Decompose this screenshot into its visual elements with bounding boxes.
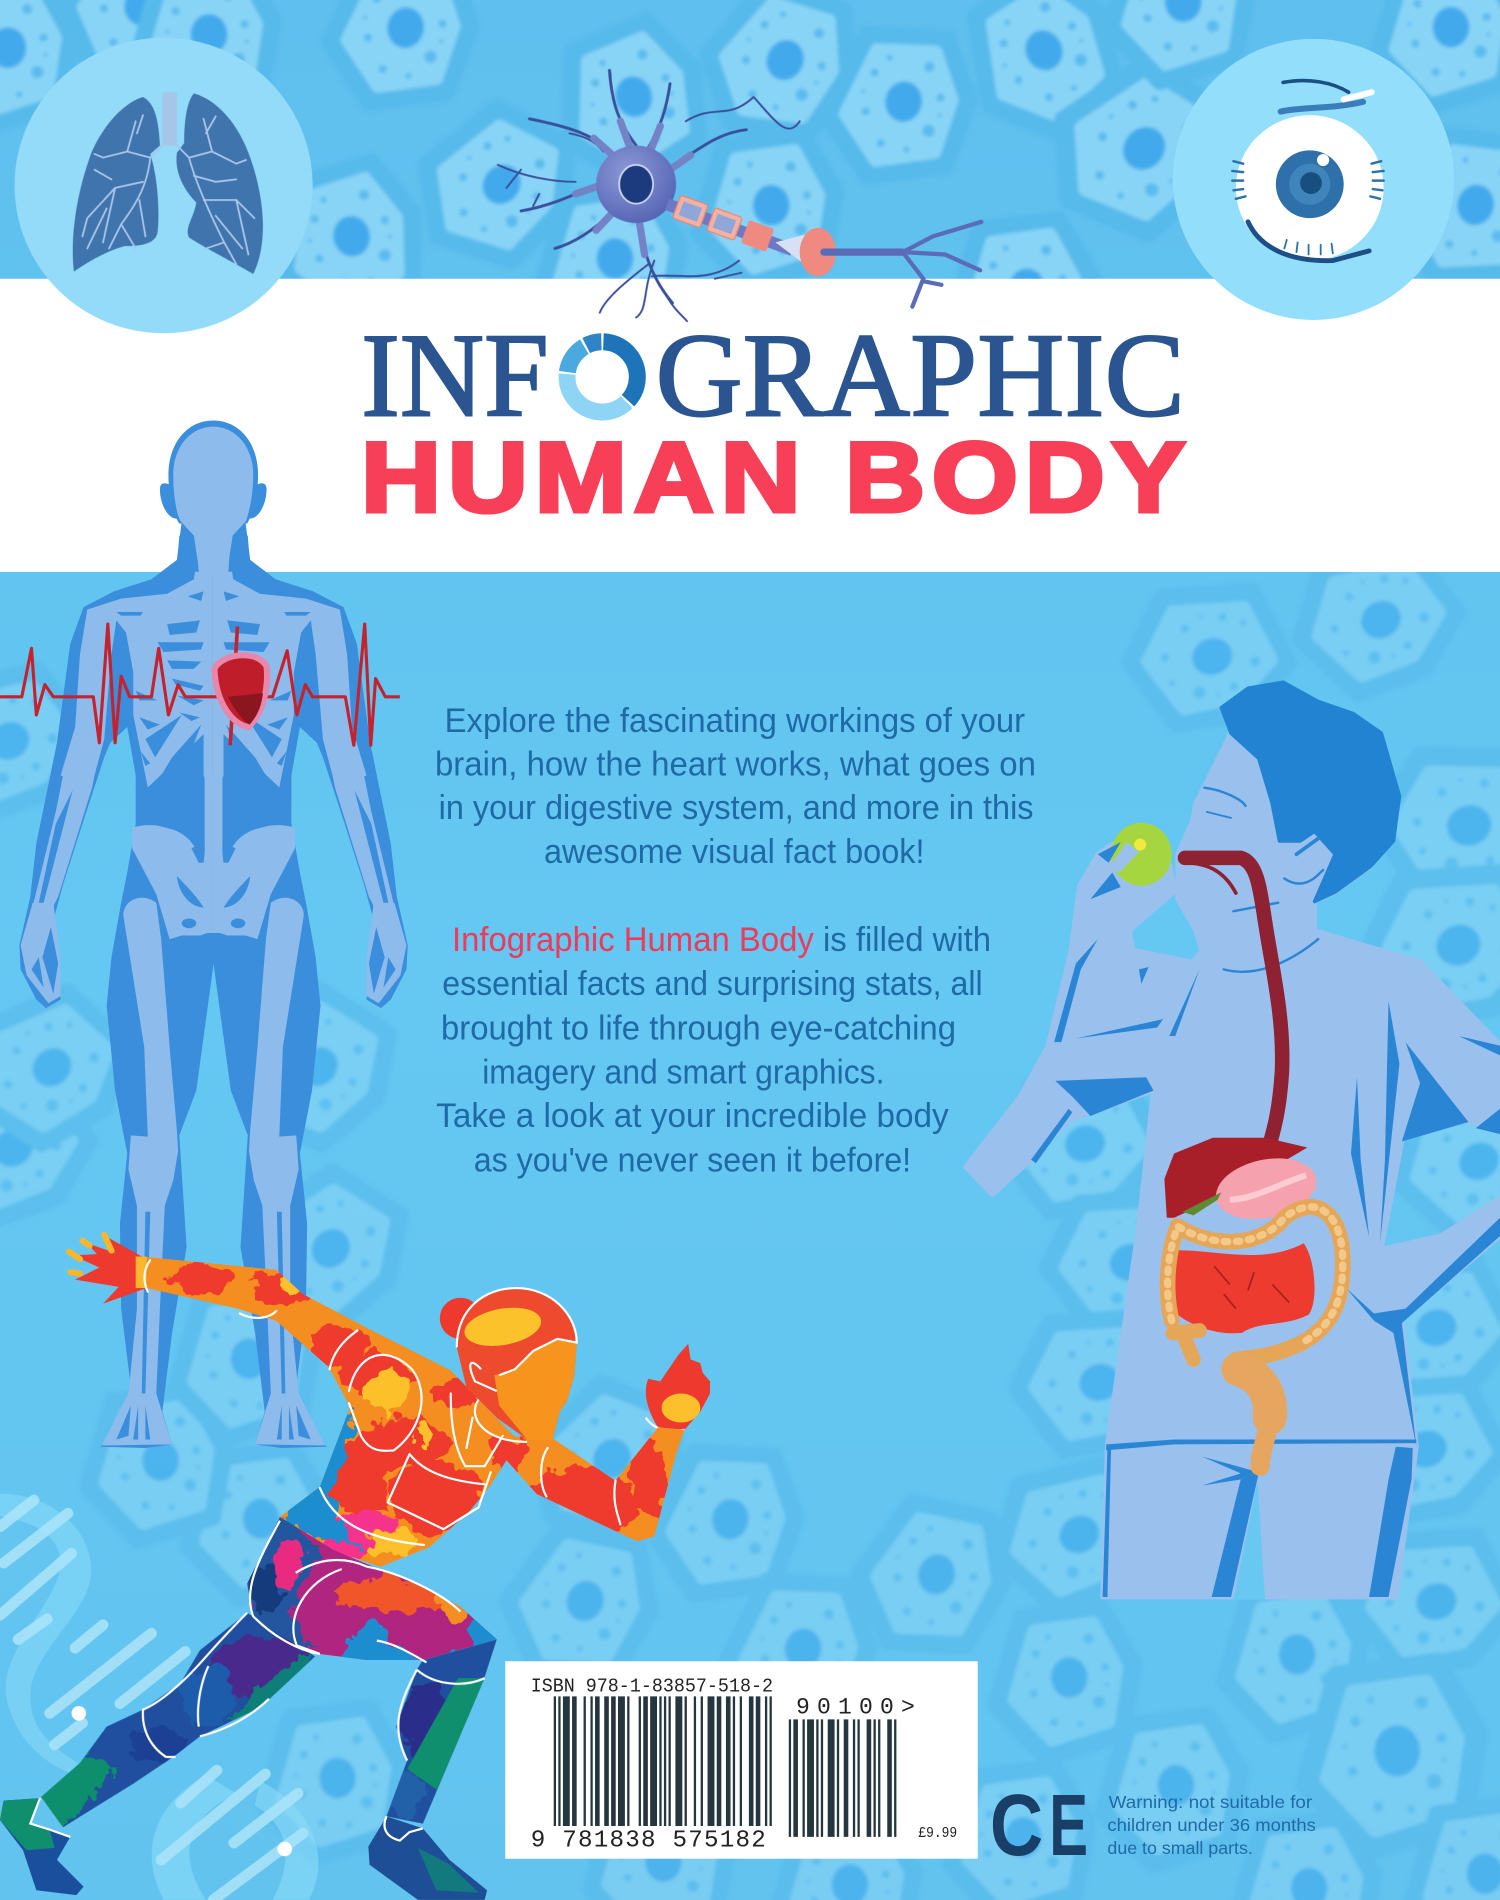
CE mark <box>990 1777 1088 1874</box>
CE mark: E <box>1049 1777 1088 1874</box>
head <box>160 421 267 576</box>
barcode digits: 9 781838 575182 <box>531 1828 766 1855</box>
left lung <box>73 97 160 271</box>
large intestine <box>1168 1207 1343 1466</box>
second paragraph: Take a look at your incredible body <box>436 1097 949 1135</box>
rear hand <box>69 1235 147 1304</box>
add-on code: 90100> <box>796 1694 915 1720</box>
DNA helix bottom <box>152 1770 318 1900</box>
intro paragraph: in your digestive system, and more in this <box>439 789 1034 827</box>
runner figure <box>0 1212 727 1900</box>
warning text <box>1107 1792 1316 1858</box>
upper body <box>136 1256 684 1567</box>
intro paragraph: awesome visual fact book! <box>544 833 924 871</box>
eyeball <box>1236 115 1384 261</box>
legs <box>41 1612 497 1828</box>
hair <box>1221 682 1399 902</box>
skeleton figure <box>19 421 408 1448</box>
head <box>440 1288 577 1442</box>
trachea <box>162 92 177 145</box>
eye circle icon <box>1173 39 1454 320</box>
main barcode bars <box>554 1708 772 1815</box>
white title band <box>0 279 1500 572</box>
DNA helix left <box>0 1494 185 1781</box>
ISBN text: ISBN 978-1-83857-518-2 <box>531 1676 773 1698</box>
donut chart letter O <box>552 327 652 427</box>
stomach <box>1210 1150 1322 1228</box>
heart <box>214 626 267 745</box>
lungs circle icon <box>15 38 313 333</box>
neuron illustration <box>498 70 981 321</box>
eyelids and lashes <box>1232 81 1384 261</box>
oesophagus <box>1185 858 1282 1144</box>
small intestine <box>1170 1243 1315 1333</box>
price: £9.99 <box>918 1826 957 1842</box>
axon terminal <box>824 222 981 307</box>
bronchi <box>82 115 254 264</box>
rear shoe <box>0 1798 84 1895</box>
right lung <box>176 93 263 274</box>
title: INFOGRAPHIC <box>361 309 1185 442</box>
liver <box>1164 1138 1307 1218</box>
gap between the legs <box>1233 1481 1265 1599</box>
boy eating an apple <box>966 682 1500 1599</box>
dendrites <box>498 70 800 321</box>
iris and pupil <box>1276 150 1344 218</box>
gall bladder <box>1183 1192 1221 1215</box>
intro paragraph <box>435 702 1036 871</box>
cell body <box>596 145 676 223</box>
second paragraph: imagery and smart graphics. <box>482 1053 884 1091</box>
CE mark: C <box>990 1777 1043 1874</box>
warning text: due to small parts. <box>1107 1838 1253 1858</box>
warning text: Warning: not suitable for <box>1109 1792 1312 1812</box>
apple <box>1090 823 1172 899</box>
title: INFOGRAPHIC: O <box>560 309 645 442</box>
title: HUMAN BODY: HUMAN BODY <box>361 422 1192 533</box>
intro paragraph: brain, how the heart works, what goes on <box>435 746 1036 784</box>
second paragraph: brought to life through eye-catching <box>441 1010 956 1048</box>
ECG heartbeat line <box>0 624 400 745</box>
second paragraph: Infographic Human Body is filled with <box>452 921 991 959</box>
second paragraph <box>436 921 991 1180</box>
clothing shade lines <box>1031 939 1500 1597</box>
title: INFOGRAPHIC: INF <box>361 309 549 442</box>
axon with myelin sheath <box>663 192 797 260</box>
title: INFOGRAPHIC: GRAPHIC <box>655 309 1185 442</box>
second paragraph: essential facts and surprising stats, all <box>442 965 983 1003</box>
boy body <box>966 733 1500 1597</box>
front shoe <box>368 1816 487 1900</box>
intro paragraph: Explore the fascinating workings of your <box>445 702 1025 740</box>
add-on barcode bars <box>789 1730 896 1827</box>
face details <box>1204 788 1323 972</box>
shorts <box>230 1503 521 1684</box>
barcode box <box>505 1661 978 1859</box>
second paragraph: as you've never seen it before! <box>474 1142 911 1180</box>
body silhouette with bones <box>19 521 214 1448</box>
warning text: children under 36 months <box>1107 1815 1316 1835</box>
front hand <box>646 1344 710 1431</box>
